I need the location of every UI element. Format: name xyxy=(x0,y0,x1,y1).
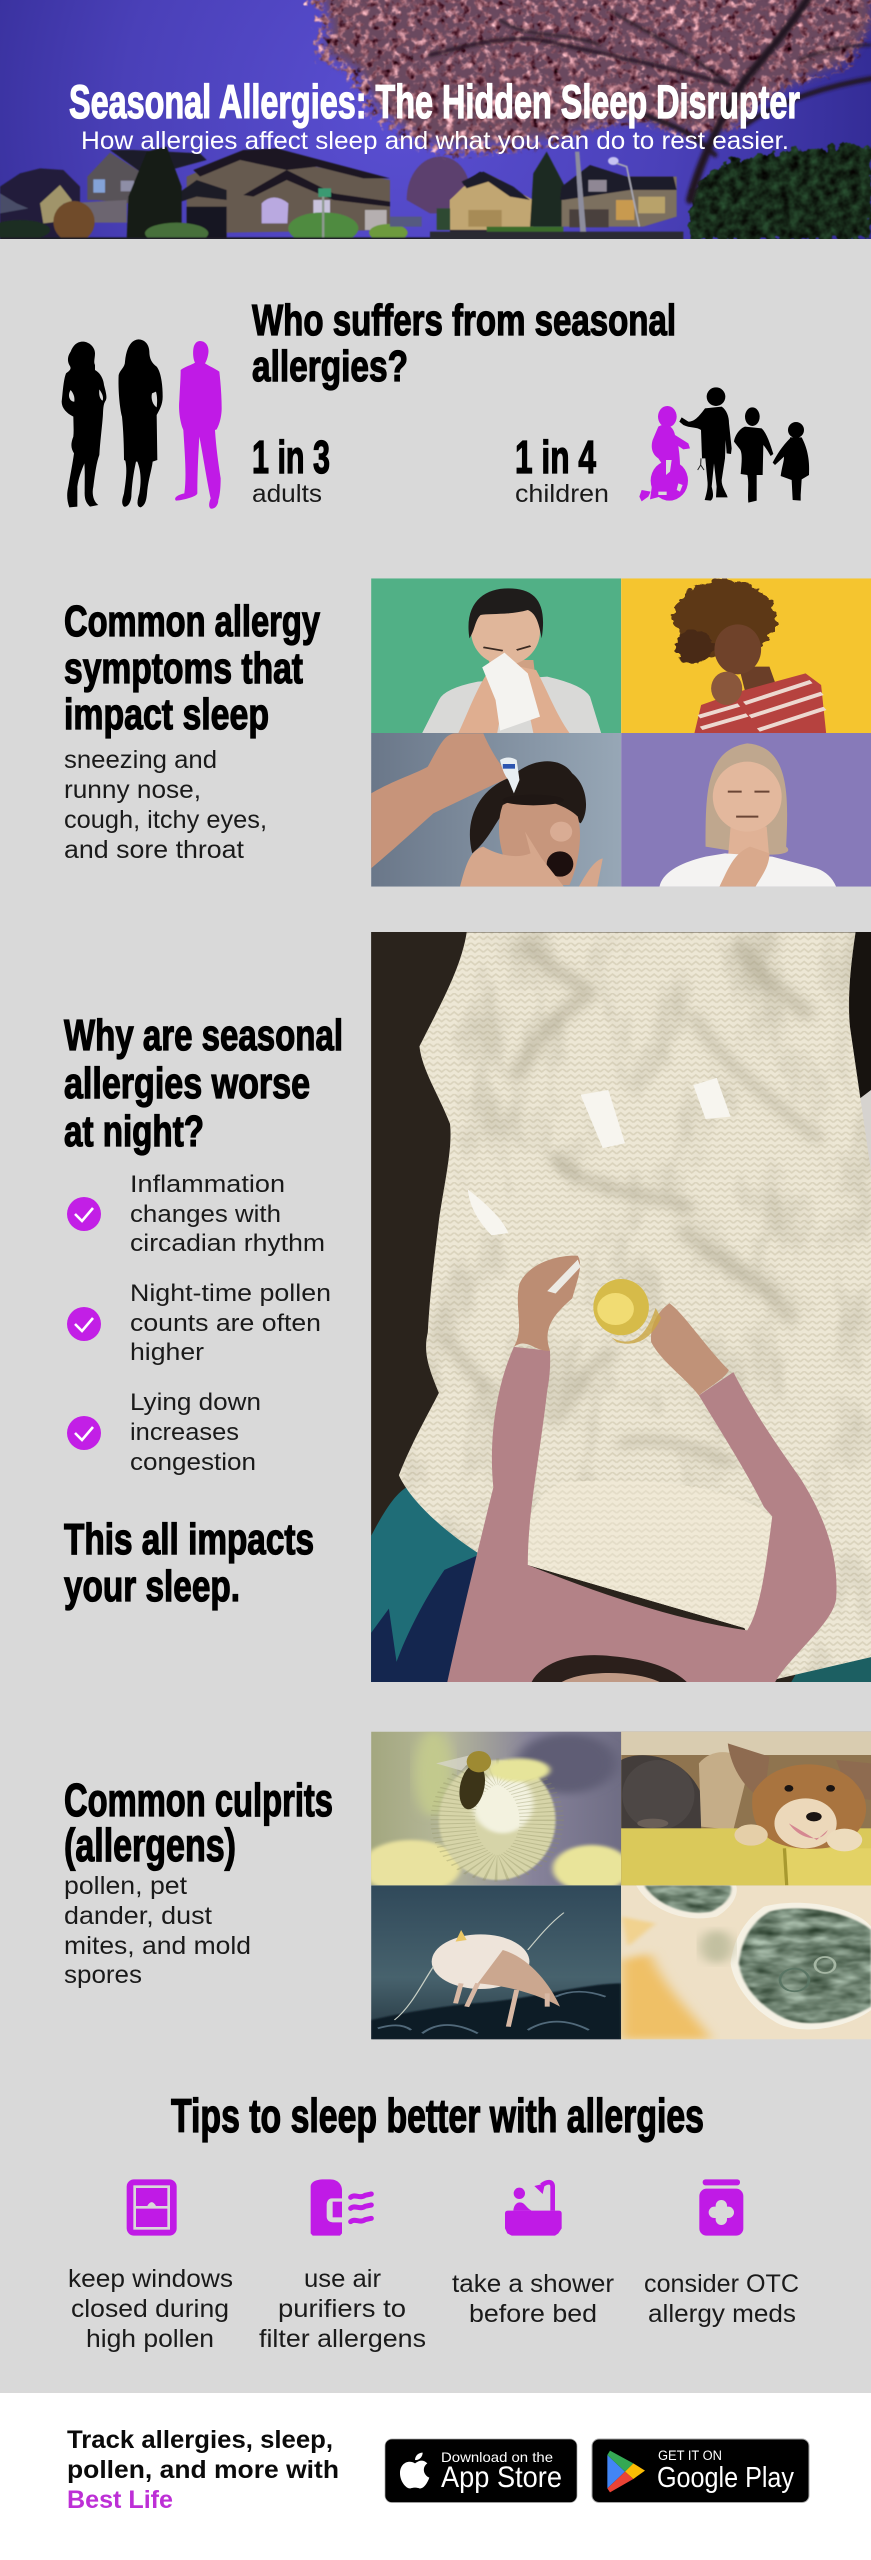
stat: 1 in 3 adults: 1 in 3 xyxy=(252,431,330,483)
culprits text: pollen, pet xyxy=(64,1872,187,1900)
badge: app store xyxy=(385,2439,577,2502)
list item: pollen counts: Night-time pollen xyxy=(130,1280,331,1307)
list item: inflammation xyxy=(67,1171,325,1257)
heading: symptoms xyxy=(64,597,320,739)
footer xyxy=(0,2393,871,2560)
closing statement xyxy=(64,1515,314,1611)
heading: who suffers: Who suffers from seasonal xyxy=(252,296,676,345)
icon: play triangle xyxy=(607,2451,645,2492)
footer call to action xyxy=(67,2426,339,2514)
panel: tips xyxy=(68,2089,799,2353)
badge: app store: App Store xyxy=(441,2461,562,2494)
list item: lying down: Lying down xyxy=(130,1389,261,1416)
stat: 1 in 4 children xyxy=(515,431,609,508)
tip: shower: take a shower xyxy=(452,2270,614,2298)
subtitle: How allergies affect sleep and what you can do to rest easier. xyxy=(81,127,789,155)
heading: who suffers: allergies? xyxy=(252,342,408,391)
list item: lying down: congestion xyxy=(130,1449,256,1476)
heading: symptoms: symptoms that xyxy=(64,644,303,693)
symptoms text: sneezing and xyxy=(64,746,217,774)
badge: app store: Download on the xyxy=(441,2449,553,2465)
header banner xyxy=(0,0,871,244)
icon: window xyxy=(127,2179,177,2236)
heading: symptoms: Common allergy xyxy=(64,597,320,646)
tip: air purifier: filter allergens xyxy=(259,2325,426,2353)
tip: otc meds: consider OTC xyxy=(644,2270,799,2298)
tip: air purifier: purifiers to xyxy=(278,2295,406,2323)
list item: pollen counts: higher xyxy=(130,1339,204,1366)
panel: symptoms xyxy=(64,578,871,887)
heading: worse at night xyxy=(64,1011,343,1156)
list item: inflammation: Inflammation xyxy=(130,1171,285,1198)
badge: google play xyxy=(592,2439,809,2502)
icon: air purifier xyxy=(311,2179,371,2236)
culprits text: mites, and mold xyxy=(64,1932,251,1960)
footer call to action: pollen, and more with xyxy=(67,2456,339,2484)
symptoms text xyxy=(64,746,267,864)
panel: culprits xyxy=(64,1730,871,2039)
list item: pollen counts: counts are often xyxy=(130,1310,321,1337)
footer call to action: Track allergies, sleep, xyxy=(67,2426,333,2454)
badge: google play: GET IT ON xyxy=(658,2448,722,2463)
heading: symptoms: impact sleep xyxy=(64,690,269,739)
icon: children silhouettes xyxy=(639,387,809,503)
list item: lying down xyxy=(67,1389,261,1476)
stat: 1 in 3 adults xyxy=(252,431,330,508)
photo: person under blanket xyxy=(371,930,871,1686)
culprits text: spores xyxy=(64,1961,142,1989)
tip: air purifier xyxy=(259,2179,426,2353)
badge: google play: Google Play xyxy=(657,2462,794,2494)
tip: windows xyxy=(68,2179,233,2353)
panel: worse at night xyxy=(64,930,871,1686)
photo grid: allergens xyxy=(361,1730,871,2039)
list item: pollen counts xyxy=(67,1280,331,1366)
icon: apple logo xyxy=(400,2453,429,2488)
icon: bath xyxy=(505,2182,562,2236)
icon: adult silhouettes xyxy=(62,339,222,509)
closing statement: This all impacts xyxy=(64,1515,314,1564)
culprits text xyxy=(64,1872,251,1989)
stat: 1 in 4 children: children xyxy=(515,480,609,508)
icon: medicine bottle xyxy=(699,2179,743,2236)
heading: worse at night: allergies worse xyxy=(64,1059,310,1108)
culprits text: dander, dust xyxy=(64,1902,212,1930)
panel: who suffers xyxy=(62,296,809,509)
stat: 1 in 3 adults: adults xyxy=(252,480,322,508)
tip: air purifier: use air xyxy=(304,2265,381,2293)
tip: otc meds xyxy=(644,2179,799,2328)
heading: worse at night: at night? xyxy=(64,1107,204,1156)
closing statement: your sleep. xyxy=(64,1562,240,1611)
heading: culprits xyxy=(64,1774,333,1871)
symptoms text: cough, itchy eyes, xyxy=(64,806,267,834)
list item: inflammation: circadian rhythm xyxy=(130,1230,325,1257)
tip: windows: keep windows xyxy=(68,2265,233,2293)
symptoms text: runny nose, xyxy=(64,776,201,804)
heading: culprits: Common culprits xyxy=(64,1774,333,1826)
footer call to action: Best Life xyxy=(67,2486,173,2514)
list item: lying down: increases xyxy=(130,1419,239,1446)
tip: shower: before bed xyxy=(469,2300,597,2328)
photo grid: symptoms xyxy=(371,578,871,887)
list item: inflammation: changes with xyxy=(130,1201,281,1228)
symptoms text: and sore throat xyxy=(64,836,244,864)
tip: windows: closed during xyxy=(71,2295,229,2323)
tip: shower xyxy=(452,2182,614,2328)
heading: worse at night: Why are seasonal xyxy=(64,1011,343,1060)
tip: otc meds: allergy meds xyxy=(648,2300,796,2328)
heading: culprits: (allergens) xyxy=(64,1819,236,1871)
heading: who suffers xyxy=(252,296,676,391)
tip: windows: high pollen xyxy=(86,2325,214,2353)
stat: 1 in 4 children: 1 in 4 xyxy=(515,431,596,483)
